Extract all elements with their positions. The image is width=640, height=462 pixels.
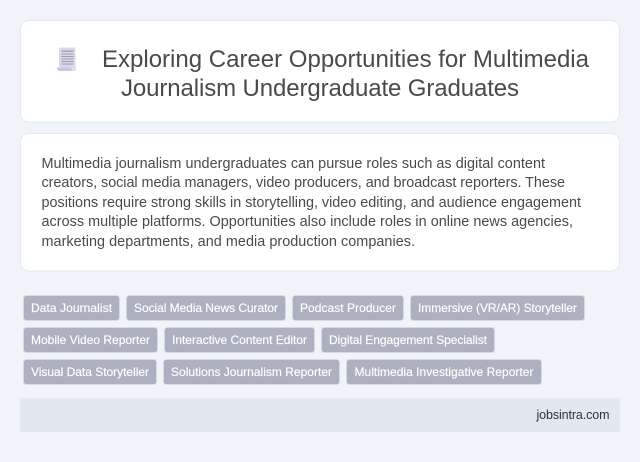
tag: Multimedia Investigative Reporter: Multimedia Investigative Reporter bbox=[354, 365, 534, 379]
tag: Podcast Producer: Podcast Producer bbox=[300, 301, 396, 315]
tag: Data Journalist bbox=[24, 296, 120, 320]
panel: description bbox=[20, 134, 620, 271]
tag: Digital Engagement Specialist bbox=[322, 328, 494, 352]
tag: Mobile Video Reporter bbox=[24, 328, 158, 352]
tag: Social Media News Curator: Social Media News Curator bbox=[134, 301, 278, 315]
footer bar bbox=[20, 398, 620, 432]
tag: Immersive (VR/AR) Storyteller: Immersive (VR/AR) Storyteller bbox=[418, 301, 577, 315]
tag: Mobile Video Reporter: Mobile Video Reporter bbox=[31, 333, 150, 347]
icon: receipt document bbox=[57, 48, 76, 71]
description text: marketing departments, and media production companies. bbox=[42, 234, 415, 250]
title bbox=[102, 46, 590, 102]
tags: career roles bbox=[24, 296, 584, 384]
title: Exploring Career Opportunities for Multimedia bbox=[102, 46, 590, 73]
tag: Immersive (VR/AR) Storyteller bbox=[410, 296, 584, 320]
title: Journalism Undergraduate Graduates bbox=[121, 75, 519, 102]
tag: Visual Data Storyteller: Visual Data Storyteller bbox=[31, 365, 149, 379]
tag: Solutions Journalism Reporter bbox=[164, 360, 340, 384]
tag: Interactive Content Editor: Interactive Content Editor bbox=[172, 333, 307, 347]
tag: Podcast Producer bbox=[292, 296, 404, 320]
tag: Solutions Journalism Reporter: Solutions Journalism Reporter bbox=[171, 365, 332, 379]
description text: Multimedia journalism undergraduates can pursue roles such as digital content bbox=[42, 156, 545, 172]
footer source text: jobsintra.com bbox=[536, 408, 610, 422]
tag: Interactive Content Editor bbox=[164, 328, 314, 352]
panel: title card bbox=[20, 20, 620, 122]
description text: across multiple platforms. Opportunities also include roles in online news agencies, bbox=[42, 214, 573, 230]
description text: positions require strong skills in storytelling, video editing, and audience engagement bbox=[42, 195, 581, 211]
tag: Digital Engagement Specialist: Digital Engagement Specialist bbox=[329, 333, 488, 347]
description text bbox=[42, 156, 581, 250]
tag: Multimedia Investigative Reporter bbox=[346, 360, 542, 384]
tag: Visual Data Storyteller bbox=[24, 360, 156, 384]
tag: Data Journalist: Data Journalist bbox=[31, 301, 113, 315]
description text: creators, social media managers, video producers, and broadcast reporters. These bbox=[42, 175, 565, 191]
tag: Social Media News Curator bbox=[126, 296, 286, 320]
